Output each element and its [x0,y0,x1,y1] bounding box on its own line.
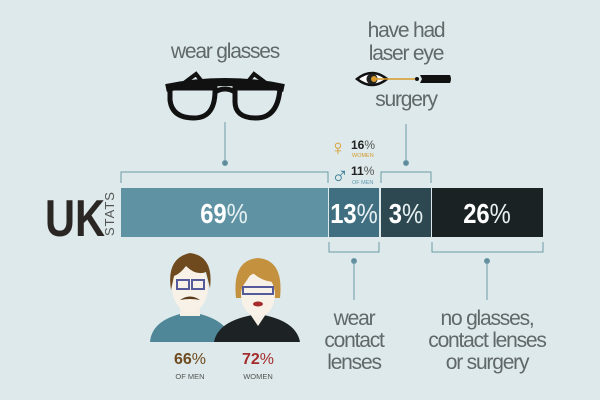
stat: women 72% [242,351,274,381]
title: UK STATS: STATS [102,191,117,236]
label: wear contact lenses: contact [324,329,385,352]
connector lines top [121,122,431,183]
stat: women 72%: 72% [242,351,274,368]
connector lines bottom [329,242,543,300]
contact lens gender stats: 11% [351,164,375,178]
contact lens gender stats [330,135,375,190]
heading: laser eye surgery [368,19,445,111]
label: wear contact lenses: wear [333,307,376,330]
stat: men 66%: OF MEN [175,372,205,381]
illustration: man [150,253,232,342]
bar chart [121,188,543,237]
stat: men 66% [174,351,206,381]
icon: glasses [166,74,284,118]
heading: wear glasses: wear glasses [170,40,280,63]
title: UK STATS: UK [45,189,105,247]
illustration: woman [214,258,300,342]
heading: laser eye surgery: laser eye [369,42,444,65]
contact lens gender stats: OF MEN [352,180,373,186]
bar chart: 69% [200,197,248,229]
label: no glasses: contact lenses [428,329,546,352]
icon: eye with laser [357,73,451,85]
bar chart: 26% [463,197,511,229]
label: wear contact lenses: lenses [327,351,381,374]
bar chart: 3% [389,197,423,229]
heading: laser eye surgery: have had [368,19,445,42]
bar chart: 13% [330,197,378,229]
label: no glasses [428,307,546,374]
label: no glasses: or surgery [446,351,530,374]
heading: laser eye surgery: surgery [375,88,439,111]
label: no glasses: no glasses, [440,307,534,330]
label: wear contact lenses [324,307,385,374]
contact lens gender stats: ♂ [331,163,349,190]
stat: women 72%: WOMEN [243,372,273,381]
contact lens gender stats: ♀ [330,135,346,160]
contact lens gender stats: 16% [351,138,375,152]
stat: men 66%: 66% [174,351,206,368]
contact lens gender stats: WOMEN [352,153,374,159]
